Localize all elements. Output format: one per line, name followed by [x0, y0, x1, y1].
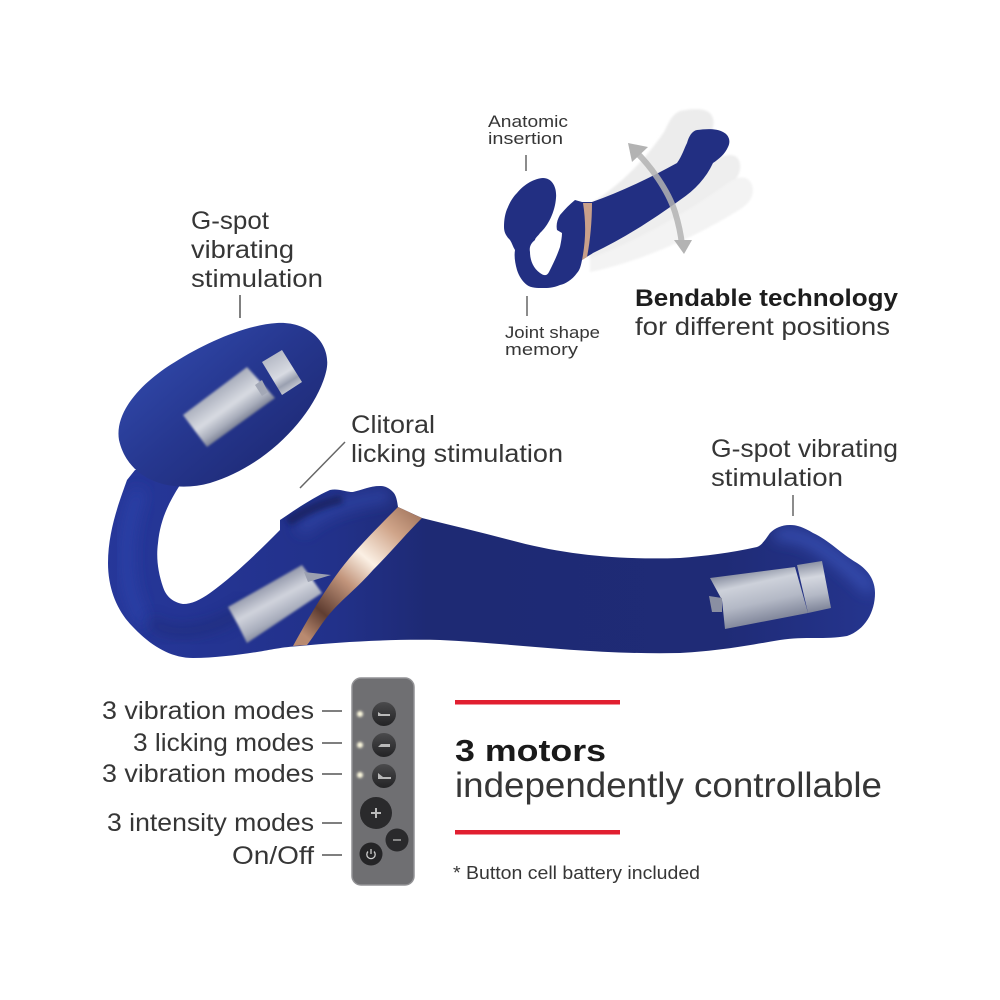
clitoral motor	[228, 565, 331, 643]
label: G-spot vibrating stimulation (right): G-spot vibrating	[711, 435, 898, 463]
remote control	[352, 678, 414, 885]
heading: G-spot vibrating stimulation (upper left): vibrating	[191, 236, 294, 264]
label: G-spot vibrating stimulation (right): stimulation	[711, 464, 843, 492]
product neck and body	[108, 470, 875, 658]
label: Anatomic insertion: insertion	[488, 129, 563, 148]
text: Bendable technology: Bendable technology	[635, 285, 899, 312]
mode buttons	[372, 702, 396, 788]
label: Clitoral licking stimulation: licking stimulation	[351, 440, 563, 468]
main product illustration	[108, 323, 875, 658]
heading: G-spot vibrating stimulation (upper left): stimulation	[191, 265, 323, 293]
remote labels: 3 licking modes	[133, 729, 314, 757]
plus button	[360, 797, 392, 829]
footnote: * Button cell battery included	[453, 863, 700, 883]
shaft motor	[709, 561, 831, 629]
gold band	[293, 507, 422, 646]
G-spot motor	[183, 350, 302, 447]
label: Anatomic insertion: Anatomic	[488, 112, 569, 131]
heading: G-spot vibrating stimulation (upper left): G-spot	[191, 207, 269, 235]
inset product body	[504, 129, 729, 288]
power button	[360, 842, 382, 866]
text: Bendable technology: for different positions	[635, 313, 890, 341]
bend ghost silhouettes	[590, 109, 753, 272]
label: Clitoral licking stimulation	[300, 411, 563, 488]
label: Joint shape memory: memory	[505, 340, 579, 359]
label: Clitoral licking stimulation: Clitoral	[351, 411, 435, 439]
inset: bendable product illustration	[504, 109, 753, 288]
label: Joint shape memory: Joint shape	[505, 323, 600, 342]
remote labels	[102, 697, 342, 870]
label: Anatomic insertion	[488, 112, 569, 171]
inset bend arrow	[628, 143, 692, 254]
LED indicators	[357, 711, 363, 778]
motors callout	[455, 700, 882, 834]
motors callout: independently controllable	[455, 766, 882, 805]
motors callout: 3 motors	[455, 733, 606, 768]
remote labels: 3 intensity modes	[107, 809, 314, 837]
heading: G-spot vibrating stimulation (upper left)	[191, 207, 323, 318]
text: Bendable technology	[635, 285, 899, 341]
minus button	[386, 828, 408, 852]
label: Joint shape memory	[505, 296, 600, 359]
remote labels: On/Off	[232, 842, 314, 870]
inset gold band	[582, 203, 592, 260]
label: G-spot vibrating stimulation (right)	[711, 435, 898, 516]
G-spot bulb	[118, 323, 327, 487]
remote labels: 3 vibration modes	[102, 697, 314, 725]
remote labels: 3 vibration modes	[102, 760, 314, 788]
